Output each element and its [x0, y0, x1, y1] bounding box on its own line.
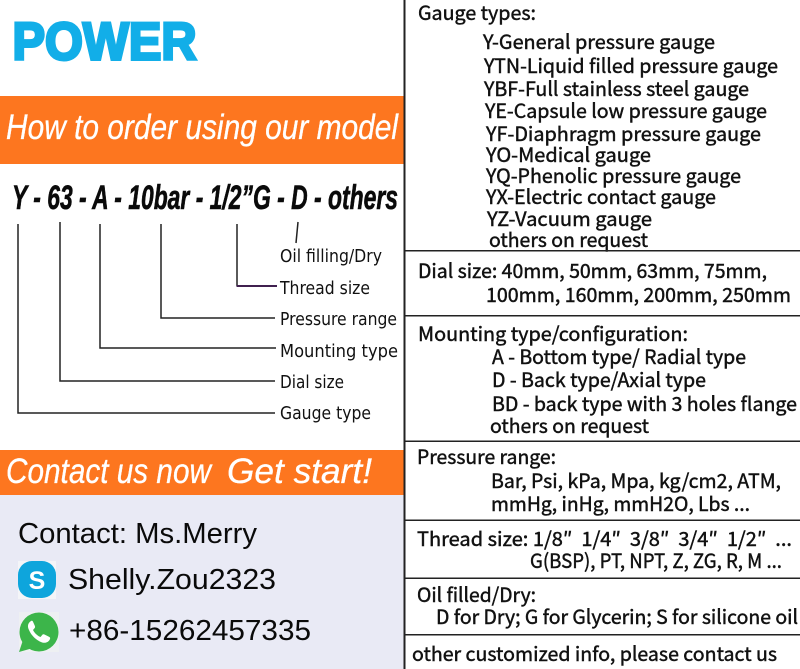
- panel: mounting type: [418, 318, 797, 439]
- panel: gauge types: YBF-Full stainless steel gauge: [483, 73, 749, 102]
- diagram: model code leader lines: [18, 222, 298, 413]
- icon: skype: [18, 561, 56, 599]
- banner: contact us: [0, 450, 404, 495]
- panel: mounting type: BD - back type with 3 holes flange: [492, 388, 797, 417]
- panel: mounting type: A - Bottom type/ Radial type: [492, 341, 746, 370]
- panel: pressure range: mmHg, inHg, mmH2O, Lbs ...: [491, 488, 750, 517]
- phone number: +86-15262457335: [69, 615, 311, 647]
- panel: gauge types: YQ-Phenolic pressure gauge: [485, 160, 741, 189]
- banner: contact us: Get start!: [227, 452, 372, 491]
- panel: thread size: Thread size: 1/8″ 1/4″ 3/8″ 3/4″ 1/2″ ...: [417, 523, 792, 552]
- panel: gauge types: YE-Capsule low pressure gauge: [484, 95, 767, 124]
- skype id: Shelly.Zou2323: [68, 564, 276, 596]
- panel: gauge types: YTN-Liquid filled pressure gauge: [483, 50, 778, 79]
- icon: skype: S: [29, 567, 45, 595]
- panel: oil filled or dry: [417, 579, 798, 630]
- banner: contact us: Contact us now: [6, 452, 213, 491]
- labels: model code parts: [279, 247, 398, 424]
- banner: how to order: [0, 96, 404, 164]
- labels: model code parts: Thread size: [279, 279, 370, 299]
- icon: whatsapp: [19, 612, 59, 652]
- panel: mounting type: others on request: [490, 410, 650, 439]
- labels: model code parts: Mounting type: [280, 342, 398, 362]
- panel: dial size: [418, 255, 791, 308]
- panel: oil filled or dry: D for Dry; G for Glycerin; S for silicone oil: [436, 601, 798, 630]
- panel: gauge types: YX-Electric contact gauge: [485, 181, 716, 210]
- panel: gauge types: YF-Diaphragm pressure gauge: [485, 118, 761, 147]
- panel: oil filled or dry: Oil filled/Dry:: [417, 579, 536, 608]
- panel: dial size: 100mm, 160mm, 200mm, 250mm: [486, 279, 791, 308]
- panel: thread size: [417, 523, 792, 574]
- contact name: Contact: Ms.Merry: [18, 518, 258, 550]
- panel: mounting type: D - Back type/Axial type: [492, 364, 706, 393]
- banner: how to order: How to order using our model: [6, 108, 399, 147]
- note: customized info: other customized info, please contact us: [412, 638, 777, 667]
- panel: left column: [0, 12, 404, 669]
- panel: pressure range: Bar, Psi, kPa, Mpa, kg/cm2, ATM,: [491, 465, 781, 494]
- logo: POWER: POWER: [12, 12, 196, 72]
- panel: gauge types: Y-General pressure gauge: [482, 26, 715, 55]
- divider: vertical center line: [404, 0, 406, 669]
- panel: contact details: [0, 495, 404, 669]
- labels: model code parts: Dial size: [280, 373, 344, 393]
- labels: model code parts: Pressure range: [280, 310, 397, 330]
- labels: model code parts: Oil filling/Dry: [280, 247, 382, 267]
- panel: dial size: Dial size: 40mm, 50mm, 63mm, 75mm,: [418, 255, 767, 284]
- panel: pressure range: Pressure range:: [417, 441, 556, 470]
- panel: thread size: G(BSP), PT, NPT, Z, ZG, R, M ...: [530, 545, 782, 574]
- labels: model code parts: Gauge type: [280, 404, 371, 424]
- panel: gauge types: YZ-Vacuum gauge: [486, 203, 652, 232]
- model code: Y - 63 - A - 10bar - 1/2”G - D - others: [12, 179, 398, 217]
- panel: pressure range: [417, 441, 781, 517]
- panel: gauge types: YO-Medical gauge: [485, 139, 651, 168]
- panel: gauge types: [418, 0, 778, 253]
- panel: mounting type: Mounting type/configuration:: [418, 318, 688, 347]
- panel: gauge types: others on request: [489, 224, 649, 253]
